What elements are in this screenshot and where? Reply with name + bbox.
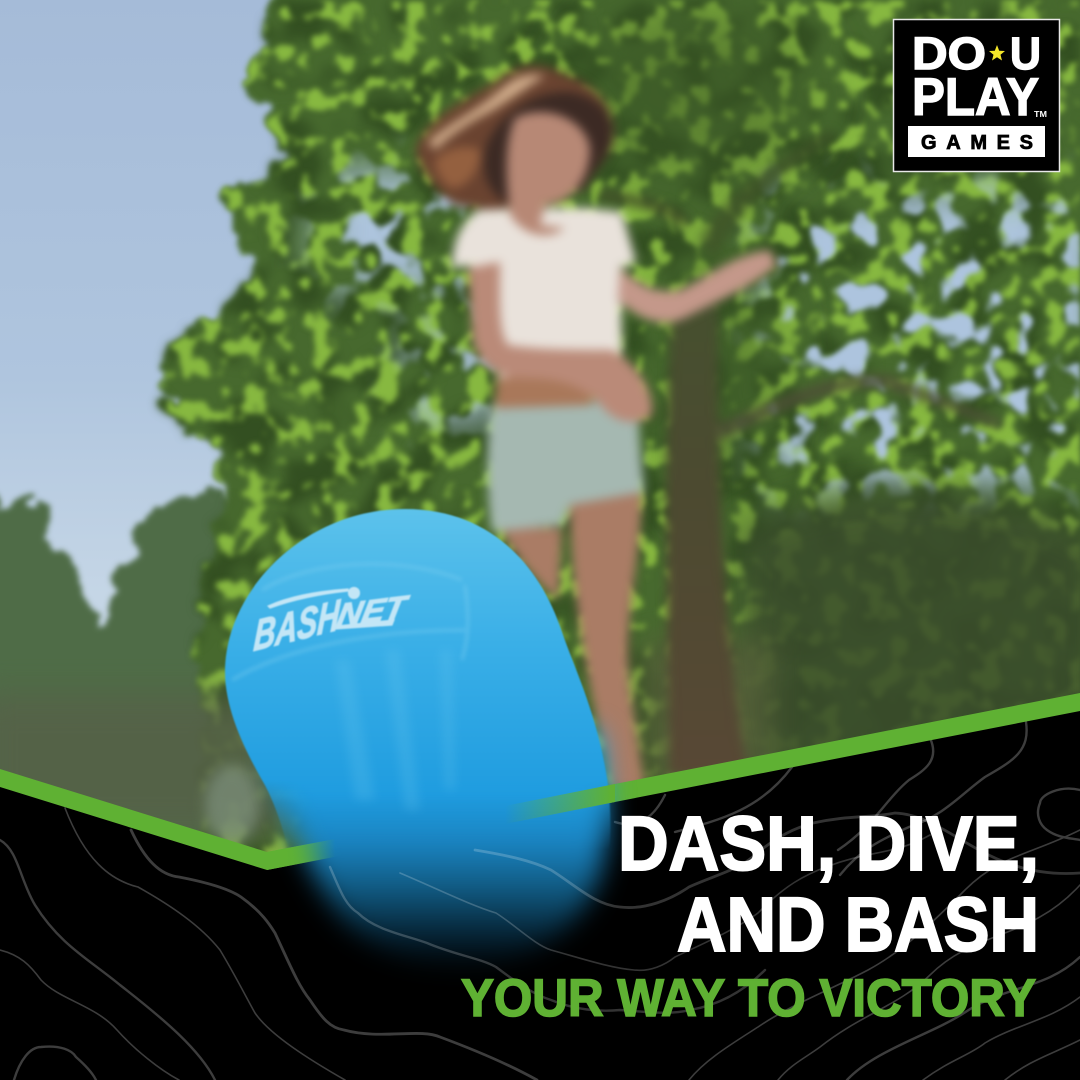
ball: motion streaks bbox=[335, 650, 455, 810]
girl: face and neck bbox=[507, 112, 590, 235]
foliage highlights bbox=[155, 0, 1080, 880]
girl: hair mass bbox=[416, 66, 614, 209]
girl: shirt bbox=[452, 208, 636, 378]
logo: yellow star bbox=[989, 45, 1005, 60]
girl: shorts bbox=[488, 400, 644, 532]
contour lines showing through the ball bbox=[330, 813, 1080, 1013]
girl: hair highlight bbox=[428, 75, 545, 150]
foliage shadows bbox=[155, 0, 1080, 880]
photo background: far trees lower left bbox=[0, 490, 300, 850]
logo: Do U Play Games: DO bbox=[912, 28, 986, 79]
ball: lower motion blur fading into black bbox=[268, 730, 607, 966]
girl jumping bbox=[416, 66, 777, 790]
ball: BASHNET logo: NET bbox=[335, 588, 412, 633]
ball: upper body bbox=[224, 508, 611, 844]
headline: AND BASH bbox=[677, 882, 1039, 968]
girl: near arm bbox=[468, 262, 652, 422]
tree trunk and branches bbox=[598, 130, 1000, 775]
blue ball bbox=[225, 509, 610, 966]
girl: midriff bbox=[495, 372, 592, 408]
headline: DASH, DIVE, bbox=[618, 801, 1039, 887]
pale shrub bbox=[204, 765, 260, 845]
logo: Do U Play Games: U bbox=[1010, 28, 1041, 79]
girl: reddish hair bbox=[435, 147, 480, 188]
headline bbox=[618, 801, 1039, 968]
shaded canopy centre bbox=[570, 0, 810, 530]
ball: BASHNET logo: BASH bbox=[252, 591, 342, 661]
black lower panel bbox=[0, 702, 1080, 1080]
dark woodland lower centre and left bbox=[0, 640, 770, 835]
logo: Do U Play Games: TM bbox=[1034, 110, 1047, 119]
green band fading across the ball bbox=[267, 784, 615, 870]
green diagonal band bbox=[0, 693, 1080, 870]
girl: legs bbox=[500, 490, 645, 790]
girl: far arm bbox=[618, 250, 777, 322]
dark woodland lower right bbox=[740, 490, 1080, 790]
girl: dark hair bbox=[484, 92, 612, 205]
logo: Do U Play Games: GAMES bbox=[921, 132, 1033, 154]
sky gaps in the tree bbox=[320, 170, 1080, 490]
subheading: YOUR WAY TO VICTORY bbox=[461, 969, 1036, 1028]
logo: Do U Play Games: PLAY bbox=[912, 68, 1039, 127]
photo background: main tree canopy bbox=[155, 0, 1080, 880]
ball: band seam highlights bbox=[232, 564, 468, 680]
logo: Do U Play Games bbox=[894, 20, 1060, 172]
contour line pattern bbox=[0, 722, 1080, 1080]
